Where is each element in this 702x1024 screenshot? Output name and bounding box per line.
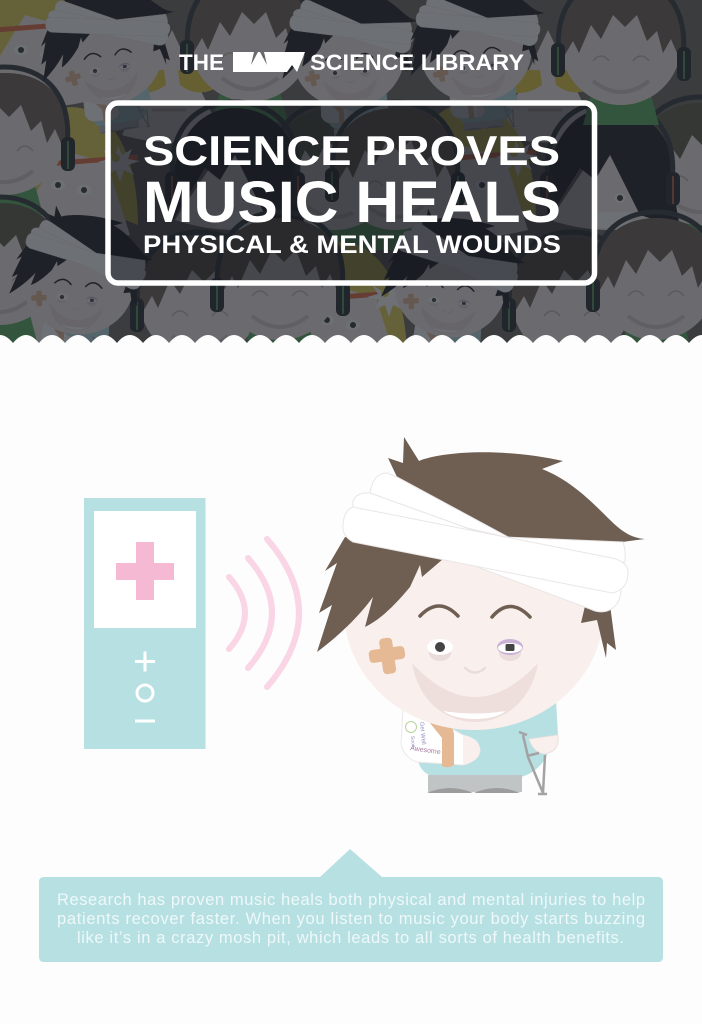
injured character: [317, 437, 645, 794]
header crowd pattern: [0, 0, 702, 380]
logo line: The Science Library: THE: [179, 50, 224, 75]
callout text: patients recover faster. When you listen to music your body starts buzzing: [57, 910, 645, 928]
logo line: The Science Library: SCIENCE LIBRARY: [310, 50, 524, 75]
callout: [39, 849, 663, 962]
sound waves: [229, 539, 299, 687]
icon: medical cross: [116, 542, 174, 600]
cast signatures: Soon: [409, 736, 416, 748]
callout text: [57, 891, 645, 947]
callout text: Research has proven music heals both physical and mental injuries to help: [57, 891, 645, 909]
scalloped header edge: [0, 335, 702, 350]
title line 2: MUSIC HEALS: [143, 170, 561, 235]
cast signatures: [406, 722, 441, 756]
player controls: [135, 652, 155, 721]
title line 3: PHYSICAL & MENTAL WOUNDS: [143, 231, 561, 259]
callout text: like it’s in a crazy mosh pit, which leads to all sorts of health benefits.: [77, 929, 624, 947]
music player: [84, 498, 206, 749]
cast signatures: Awesome: [410, 745, 441, 756]
title line 1: SCIENCE PROVES: [143, 127, 560, 174]
logo line: The Science Library: [179, 50, 524, 75]
title box: [108, 103, 594, 283]
icon: library logo block: [233, 52, 305, 72]
player screen: [94, 511, 196, 628]
cast signatures: Get Well: [418, 722, 426, 745]
